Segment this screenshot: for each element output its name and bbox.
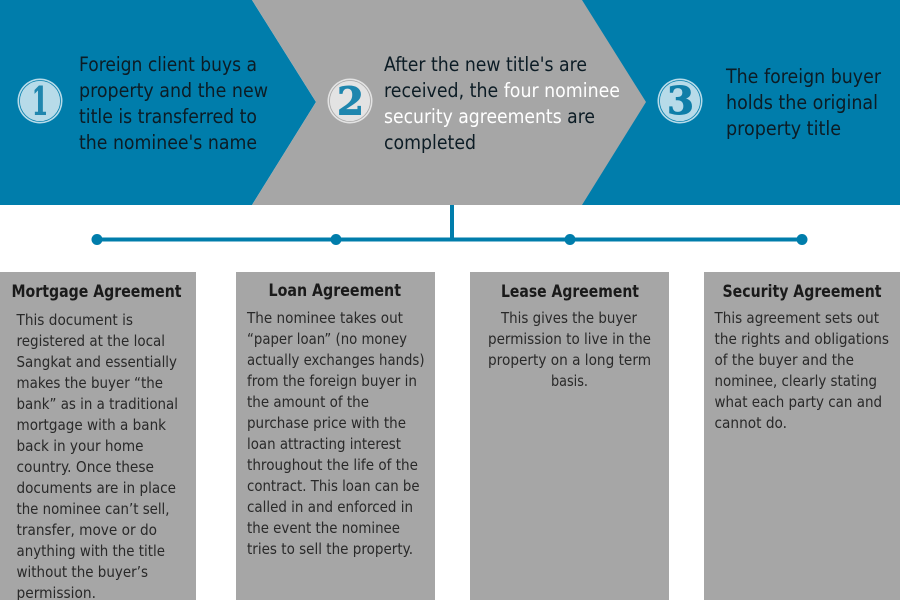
text: loan agreement body — [246, 309, 424, 558]
text: security agreement body: This agreement sets out — [714, 309, 879, 327]
icon: number 2 badge — [328, 78, 372, 124]
text: step 3: property title — [726, 117, 841, 140]
text: loan agreement body: loan attracting interest — [247, 435, 401, 453]
panel: mortgage agreement — [0, 272, 196, 600]
text: loan agreement body: contract. This loan can be — [247, 477, 420, 495]
text: step 3: holds the original — [726, 91, 878, 114]
text: step 3: The foreign buyer — [725, 65, 882, 88]
text: step 1: the nominee's name — [79, 131, 257, 154]
text: mortgage agreement body: without the buyer’s — [16, 563, 148, 581]
icon: number 1 badge — [18, 78, 62, 124]
heading: loan agreement: Loan Agreement — [268, 281, 401, 300]
text: lease agreement body: property on a long term — [488, 351, 651, 369]
text: lease agreement body: basis. — [551, 372, 588, 390]
text: mortgage agreement body: documents are in place — [16, 479, 176, 497]
text: mortgage agreement body: country. Once these — [16, 458, 154, 476]
text: step 2: completed — [384, 131, 476, 154]
panel: loan agreement — [236, 272, 435, 600]
icon: number 3 badge — [658, 78, 702, 124]
text: security agreement body: cannot do. — [714, 414, 787, 432]
text: loan agreement body: actually exchanges hands) — [247, 351, 424, 369]
panel: top process banner — [0, 0, 900, 205]
text: loan agreement body: throughout the life of the — [247, 456, 418, 474]
text: mortgage agreement body: back in your home — [16, 437, 144, 455]
text: step 1: property and the new — [79, 79, 268, 102]
text: mortgage agreement body — [16, 311, 178, 600]
panel: step 3 background — [560, 0, 900, 205]
text: loan agreement body: purchase price with the — [247, 414, 406, 432]
timeline connector — [92, 205, 808, 245]
text: security agreement body: nominee, clearly stating — [714, 372, 877, 390]
panel: lease agreement — [470, 272, 669, 600]
text: step 2: security agreements are — [384, 105, 595, 128]
text: mortgage agreement body: anything with the title — [16, 542, 165, 560]
text: loan agreement body: from the foreign buyer in — [247, 372, 417, 390]
text: loan agreement body: called in and enforced in — [247, 498, 413, 516]
text: step 1: Foreign client buys a — [79, 53, 257, 76]
text: security agreement body — [714, 309, 889, 432]
text: security agreement body: what each party can and — [714, 393, 882, 411]
text: loan agreement body: “paper loan” (no money — [247, 330, 407, 348]
text: step 2: received, the four nominee — [384, 79, 620, 102]
text: mortgage agreement body: transfer, move or do — [16, 521, 157, 539]
text: lease agreement body: permission to live in the — [488, 330, 651, 348]
panel: step 2 chevron — [252, 0, 646, 205]
text: loan agreement body: The nominee takes out — [246, 309, 403, 327]
text: step 1 — [79, 53, 268, 154]
text: loan agreement body: the amount of the — [247, 393, 369, 411]
text: step 2 — [384, 53, 620, 154]
text: step 1: title is transferred to — [79, 105, 257, 128]
heading: mortgage agreement: Mortgage Agreement — [12, 282, 182, 301]
text: loan agreement body: tries to sell the property. — [247, 540, 413, 558]
panel: step 1 arrow — [0, 0, 316, 205]
text: mortgage agreement body: Sangkat and essentially — [16, 353, 177, 371]
text: mortgage agreement body: bank” as in a traditional — [16, 395, 178, 413]
icon: number 2 badge: 2 — [337, 78, 364, 124]
text: mortgage agreement body: the nominee can’t sell, — [16, 500, 170, 518]
text: security agreement body: of the buyer and the — [714, 351, 854, 369]
text: mortgage agreement body: makes the buyer “the — [16, 374, 163, 392]
text: step 2: After the new title's are — [384, 53, 587, 76]
text: lease agreement body — [488, 309, 651, 390]
text: mortgage agreement body: mortgage with a bank — [16, 416, 166, 434]
icon: number 1 badge: 1 — [32, 78, 48, 124]
text: lease agreement body: This gives the buyer — [500, 309, 638, 327]
text: loan agreement body: the event the nominee — [247, 519, 400, 537]
panel: security agreement — [704, 272, 900, 600]
text: step 3 — [725, 65, 882, 140]
text: mortgage agreement body: This document is — [16, 311, 133, 329]
icon: number 3 badge: 3 — [667, 78, 694, 123]
text: mortgage agreement body: registered at the local — [16, 332, 165, 350]
heading: lease agreement: Lease Agreement — [501, 282, 639, 301]
